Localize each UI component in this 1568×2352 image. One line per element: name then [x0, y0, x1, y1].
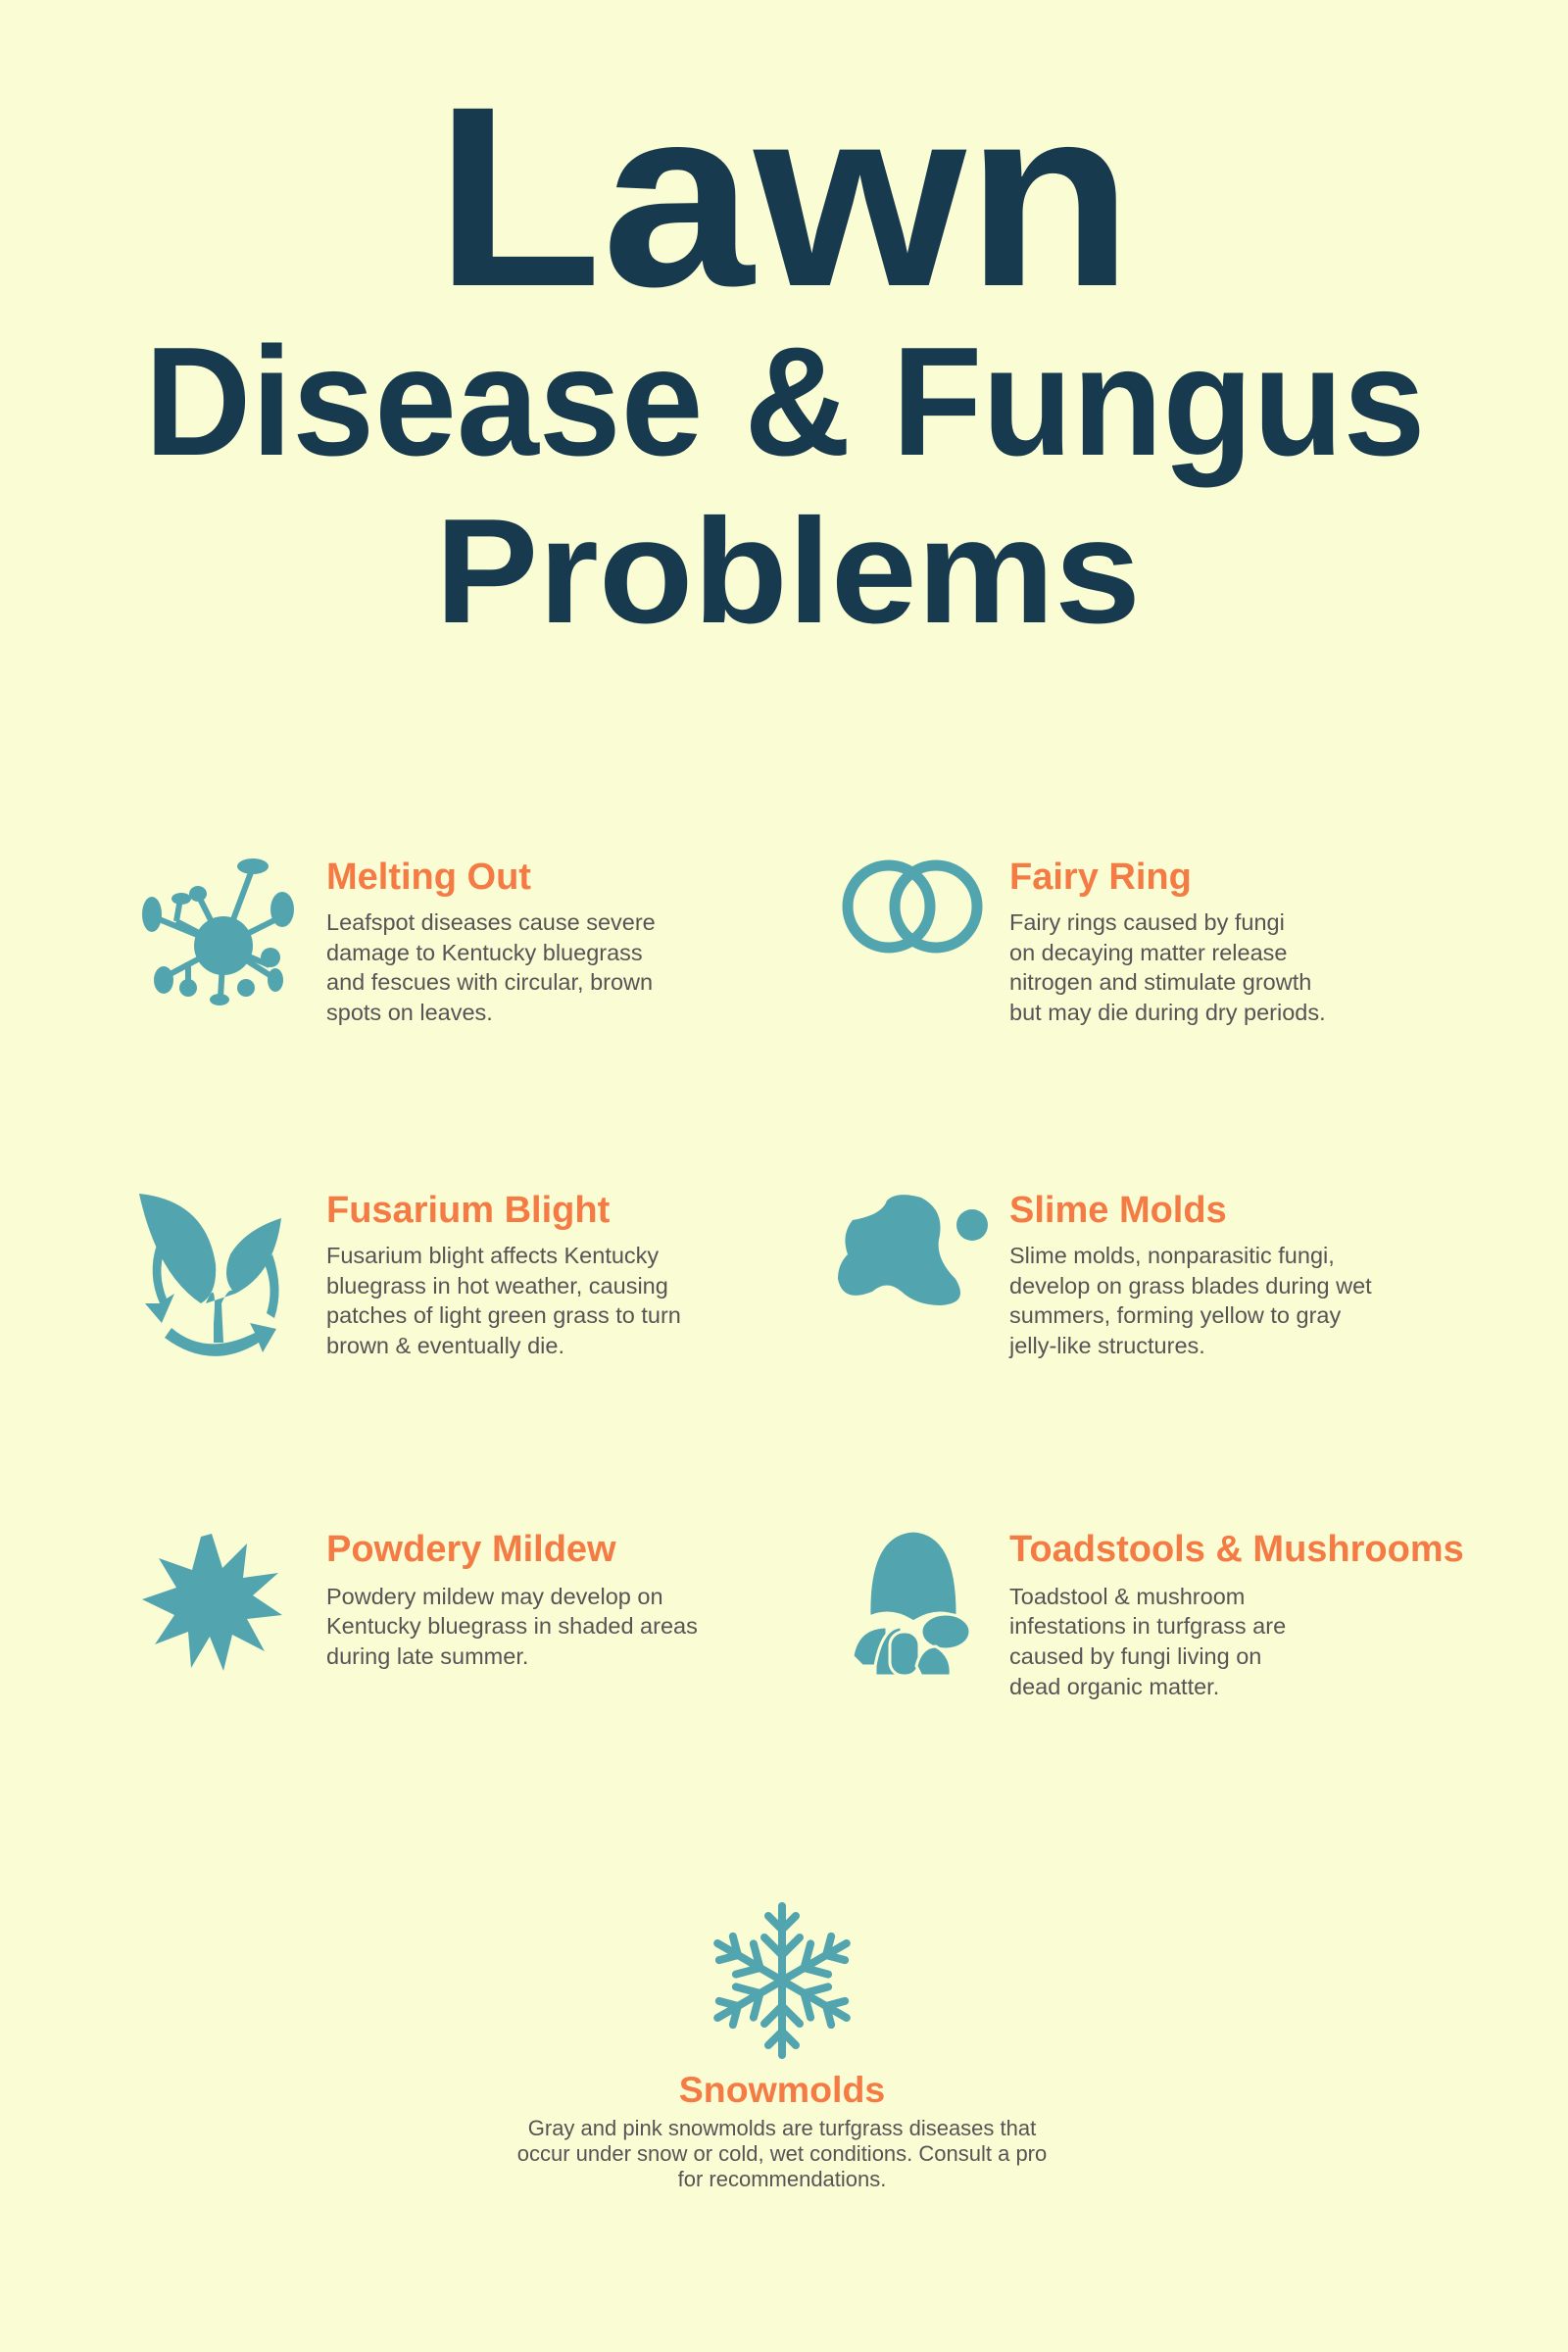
- heading: Toadstools & Mushrooms: [1009, 1529, 1464, 1570]
- panel: fairy ring: [848, 857, 1326, 1025]
- icon: virus: [142, 858, 294, 1005]
- title: Disease & Fungus: [145, 316, 1425, 488]
- text block: Fusarium blight affects Kentucky: [326, 1243, 659, 1268]
- icon: mushrooms: [853, 1531, 970, 1676]
- heading: Powdery Mildew: [326, 1529, 616, 1570]
- title: [145, 53, 1425, 655]
- panel: powdery mildew: [142, 1529, 698, 1671]
- icon: starburst: [142, 1534, 282, 1671]
- text block: Slime molds, nonparasitic fungi,: [1009, 1243, 1335, 1268]
- panel: powdery mildew: Kentucky bluegrass in shaded areas: [326, 1613, 698, 1639]
- title: Lawn: [435, 53, 1133, 340]
- text block: Powdery mildew may develop on: [326, 1584, 663, 1609]
- panel: powdery mildew: during late summer.: [326, 1643, 528, 1669]
- panel: snowmolds: for recommendations.: [678, 2167, 886, 2191]
- panel: melting out: [142, 857, 656, 1025]
- title: Problems: [435, 488, 1141, 655]
- heading: Melting Out: [326, 857, 531, 898]
- panel: slime molds: jelly-like structures.: [1008, 1333, 1205, 1358]
- heading: Fairy Ring: [1009, 857, 1192, 898]
- panel: toadstools: dead organic matter.: [1009, 1674, 1219, 1699]
- panel: melting out: and fescues with circular, brown: [326, 969, 653, 995]
- text block: Leafspot diseases cause severe: [326, 909, 656, 935]
- panel: fusarium blight: patches of light green grass to turn: [326, 1302, 681, 1328]
- panel: slime molds: summers, forming yellow to gray: [1009, 1302, 1341, 1328]
- panel: melting out: spots on leaves.: [326, 1000, 493, 1025]
- panel: toadstools: infestations in turfgrass are: [1009, 1613, 1286, 1639]
- text block: Fairy rings caused by fungi: [1009, 909, 1285, 935]
- panel: melting out: damage to Kentucky bluegrass: [326, 940, 643, 965]
- panel: toadstools: caused by fungi living on: [1009, 1643, 1261, 1669]
- icon: snowflake: [709, 1906, 856, 2055]
- panel: fairy ring: on decaying matter release: [1009, 940, 1287, 965]
- heading: Snowmolds: [679, 2069, 885, 2110]
- icon: rings: [848, 865, 977, 948]
- panel: slime molds: develop on grass blades during wet: [1009, 1273, 1372, 1298]
- panel: fusarium blight: brown & eventually die.: [326, 1333, 564, 1358]
- heading: Fusarium Blight: [326, 1190, 611, 1231]
- text block: Gray and pink snowmolds are turfgrass diseases that: [528, 2116, 1036, 2140]
- panel: fairy ring: but may die during dry periods.: [1009, 1000, 1326, 1025]
- icon: leaves cycle: [139, 1194, 281, 1356]
- panel: slime molds: [838, 1190, 1372, 1358]
- panel: fairy ring: nitrogen and stimulate growth: [1009, 969, 1311, 995]
- heading: Slime Molds: [1009, 1190, 1227, 1231]
- icon: slime blob: [838, 1195, 988, 1305]
- panel: toadstools: [853, 1529, 1464, 1699]
- panel: fusarium blight: [139, 1190, 681, 1358]
- panel: snowmolds: [517, 1906, 1047, 2191]
- text block: Toadstool & mushroom: [1009, 1584, 1245, 1609]
- panel: snowmolds: occur under snow or cold, wet conditions. Consult a pro: [517, 2141, 1047, 2166]
- panel: fusarium blight: bluegrass in hot weather, causing: [326, 1273, 668, 1298]
